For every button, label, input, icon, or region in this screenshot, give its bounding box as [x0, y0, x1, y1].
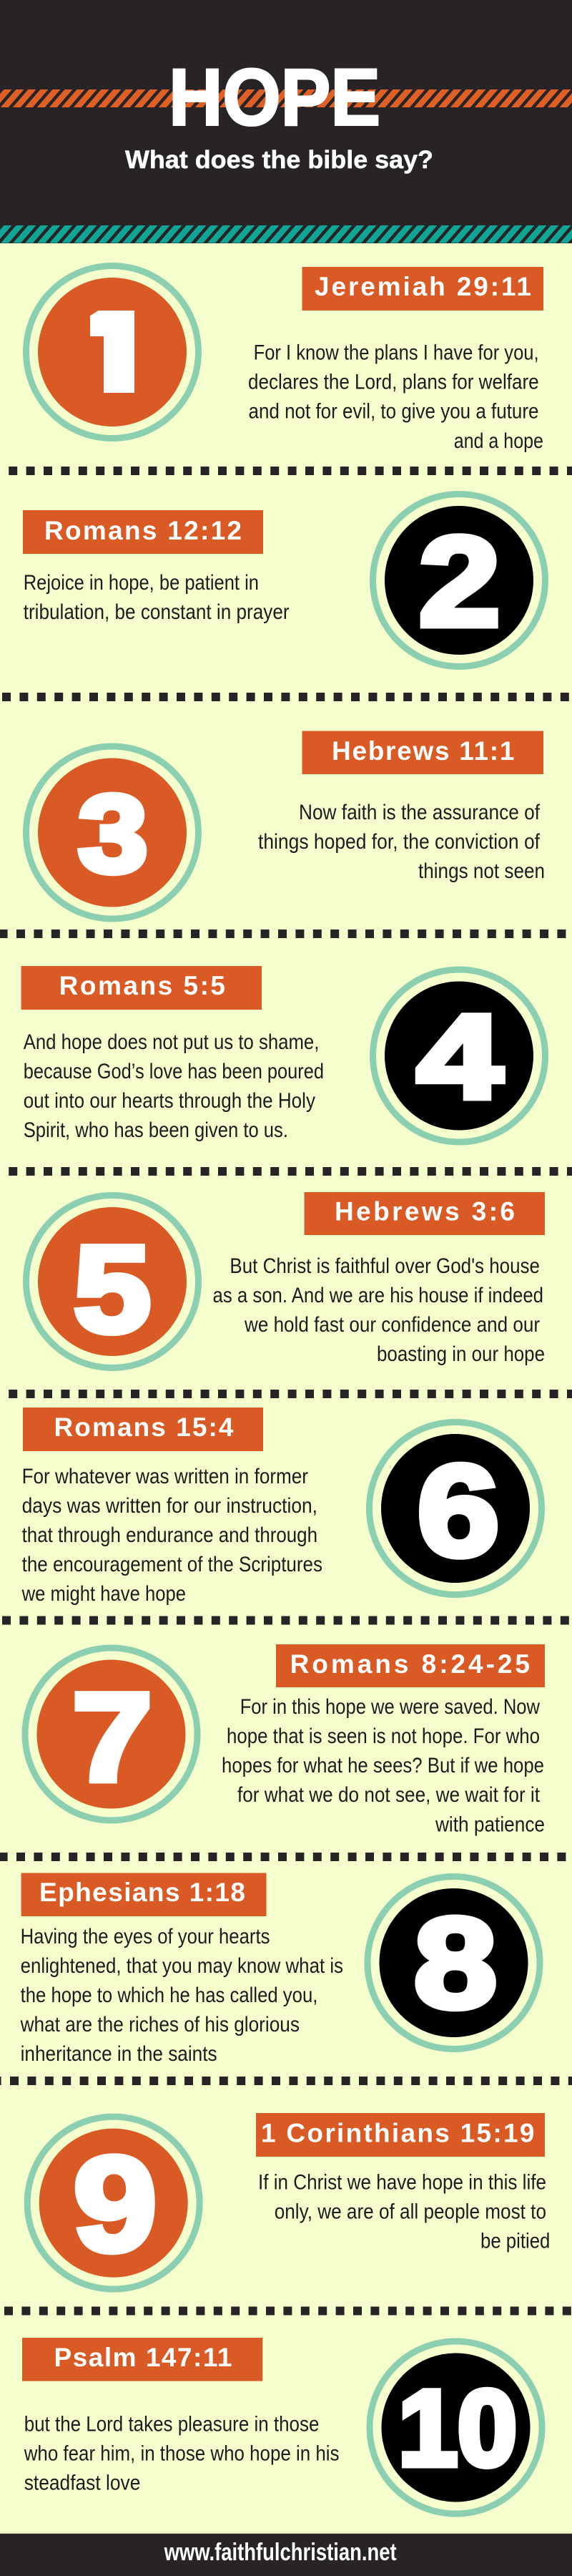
badge: number 2 — [373, 494, 545, 667]
reference label: 1 Corinthians 15:19: 1 Corinthians 15:19 — [261, 2118, 534, 2148]
badge: number 6 — [369, 1423, 542, 1594]
verse text — [258, 2170, 550, 2253]
orange stripe band — [0, 89, 572, 107]
badge: number 4: 4 — [417, 991, 502, 1123]
badge: number 8 — [368, 1876, 540, 2049]
verse text: we might have hope — [21, 1582, 186, 1606]
verse text: steadfast love — [24, 2472, 140, 2495]
verse text: but the Lord takes pleasure in those — [24, 2413, 319, 2436]
reference label: Jeremiah 29:11: Jeremiah 29:11 — [315, 272, 531, 301]
badge: number 7 — [25, 1648, 197, 1820]
verse text: be pitied — [480, 2230, 550, 2253]
verse text — [20, 1925, 343, 2066]
reference label: 1 Corinthians 15:19 — [256, 2113, 545, 2157]
verse text: out into our hearts through the Holy — [24, 1089, 315, 1113]
title: HOPE — [169, 53, 380, 142]
verse text — [222, 1695, 545, 1836]
reference label: Jeremiah 29:11 — [302, 267, 543, 311]
badge: number 7: 7 — [72, 1668, 152, 1807]
verse text: boasting in our hope — [377, 1342, 545, 1366]
reference label: Romans 8:24-25: Romans 8:24-25 — [290, 1649, 530, 1679]
badge: number 9: 9 — [73, 2129, 157, 2279]
badge: number 6: 6 — [418, 1438, 499, 1583]
badge: number 3 — [26, 746, 199, 919]
verse text — [24, 571, 290, 624]
verse text: and a hope — [454, 429, 543, 453]
verse text: Having the eyes of your hearts — [21, 1925, 270, 1948]
verse text: days was written for our instruction, — [22, 1494, 317, 1518]
badge: number 9 — [27, 2117, 199, 2289]
reference label: Psalm 147:11 — [22, 2338, 262, 2381]
verse text: with patience — [435, 1813, 545, 1836]
reference label: Hebrews 11:1: Hebrews 11:1 — [332, 736, 514, 766]
verse text: the encouragement of the Scriptures — [22, 1553, 322, 1576]
verse text — [24, 2413, 340, 2495]
website url: www.faithfulchristian.net — [164, 2539, 397, 2566]
badge: number 1 — [26, 266, 199, 438]
reference label: Romans 15:4 — [23, 1407, 263, 1451]
badge: number 1: 1 — [86, 286, 149, 414]
reference label: Romans 5:5: Romans 5:5 — [59, 971, 225, 1000]
badge: number 10 — [370, 2341, 542, 2514]
verse text: tribulation, be constant in prayer — [24, 600, 290, 624]
badge: number 4 — [373, 970, 545, 1142]
verse text: the hope to which he has called you, — [21, 1984, 317, 2007]
verse text: Now faith is the assurance of — [299, 801, 541, 824]
badge: number 5: 5 — [74, 1221, 151, 1358]
verse text: because God’s love has been poured — [24, 1060, 324, 1083]
badge: number 10: 10 — [398, 2368, 517, 2488]
verse text — [258, 801, 545, 883]
reference label: Romans 15:4: Romans 15:4 — [54, 1413, 234, 1442]
verse text: what are the riches of his glorious — [20, 2013, 300, 2036]
badge: number 2: 2 — [419, 510, 500, 653]
panel: verse 4 — [21, 966, 546, 1142]
verse text: Spirit, who has been given to us. — [24, 1118, 288, 1142]
teal stripe band — [0, 225, 572, 243]
panel: verse 9 — [27, 2113, 550, 2289]
reference label: Hebrews 11:1 — [302, 731, 543, 774]
verse text — [24, 1030, 324, 1142]
verse text — [213, 1254, 545, 1366]
footer — [0, 2534, 572, 2576]
panel: verse 8 — [20, 1873, 540, 2066]
panel: verse 6 — [21, 1407, 542, 1606]
reference label: Romans 12:12: Romans 12:12 — [44, 516, 242, 545]
panel: verse 10 — [22, 2338, 542, 2514]
verse text: who fear him, in those who hope in his — [24, 2442, 340, 2466]
panel: verse 5 — [26, 1192, 545, 1368]
verse text: enlightened, that you may know what is — [21, 1954, 343, 1978]
reference label: Ephesians 1:18 — [21, 1873, 266, 1916]
verse text: things not seen — [418, 859, 545, 883]
verse text — [248, 341, 543, 453]
verse text: inheritance in the saints — [21, 2042, 217, 2066]
reference label: Romans 5:5 — [21, 966, 262, 1010]
badge: number 3: 3 — [79, 773, 147, 895]
verse text: For whatever was written in former — [22, 1465, 308, 1488]
verse text: things hoped for, the conviction of — [258, 830, 541, 854]
reference label: Hebrews 3:6: Hebrews 3:6 — [335, 1196, 515, 1226]
verse text: And hope does not put us to shame, — [24, 1030, 319, 1054]
panel: verse 7 — [25, 1644, 545, 1836]
subtitle: What does the bible say? — [125, 146, 433, 174]
reference label: Psalm 147:11: Psalm 147:11 — [54, 2343, 232, 2372]
panel: verse 1 — [26, 266, 543, 453]
panel: verse 2 — [23, 494, 545, 667]
verse text: that through endurance and through — [22, 1523, 317, 1547]
panel: verse 3 — [26, 731, 545, 919]
reference label: Hebrews 3:6 — [305, 1192, 545, 1235]
reference label: Romans 12:12 — [23, 510, 263, 554]
verse text — [21, 1465, 322, 1606]
verse text: Rejoice in hope, be patient in — [24, 571, 259, 595]
badge: number 5 — [26, 1195, 199, 1368]
panel: header — [0, 0, 572, 243]
reference label: Ephesians 1:18: Ephesians 1:18 — [39, 1878, 245, 1907]
badge: number 8: 8 — [414, 1891, 497, 2034]
reference label: Romans 8:24-25 — [276, 1644, 545, 1687]
